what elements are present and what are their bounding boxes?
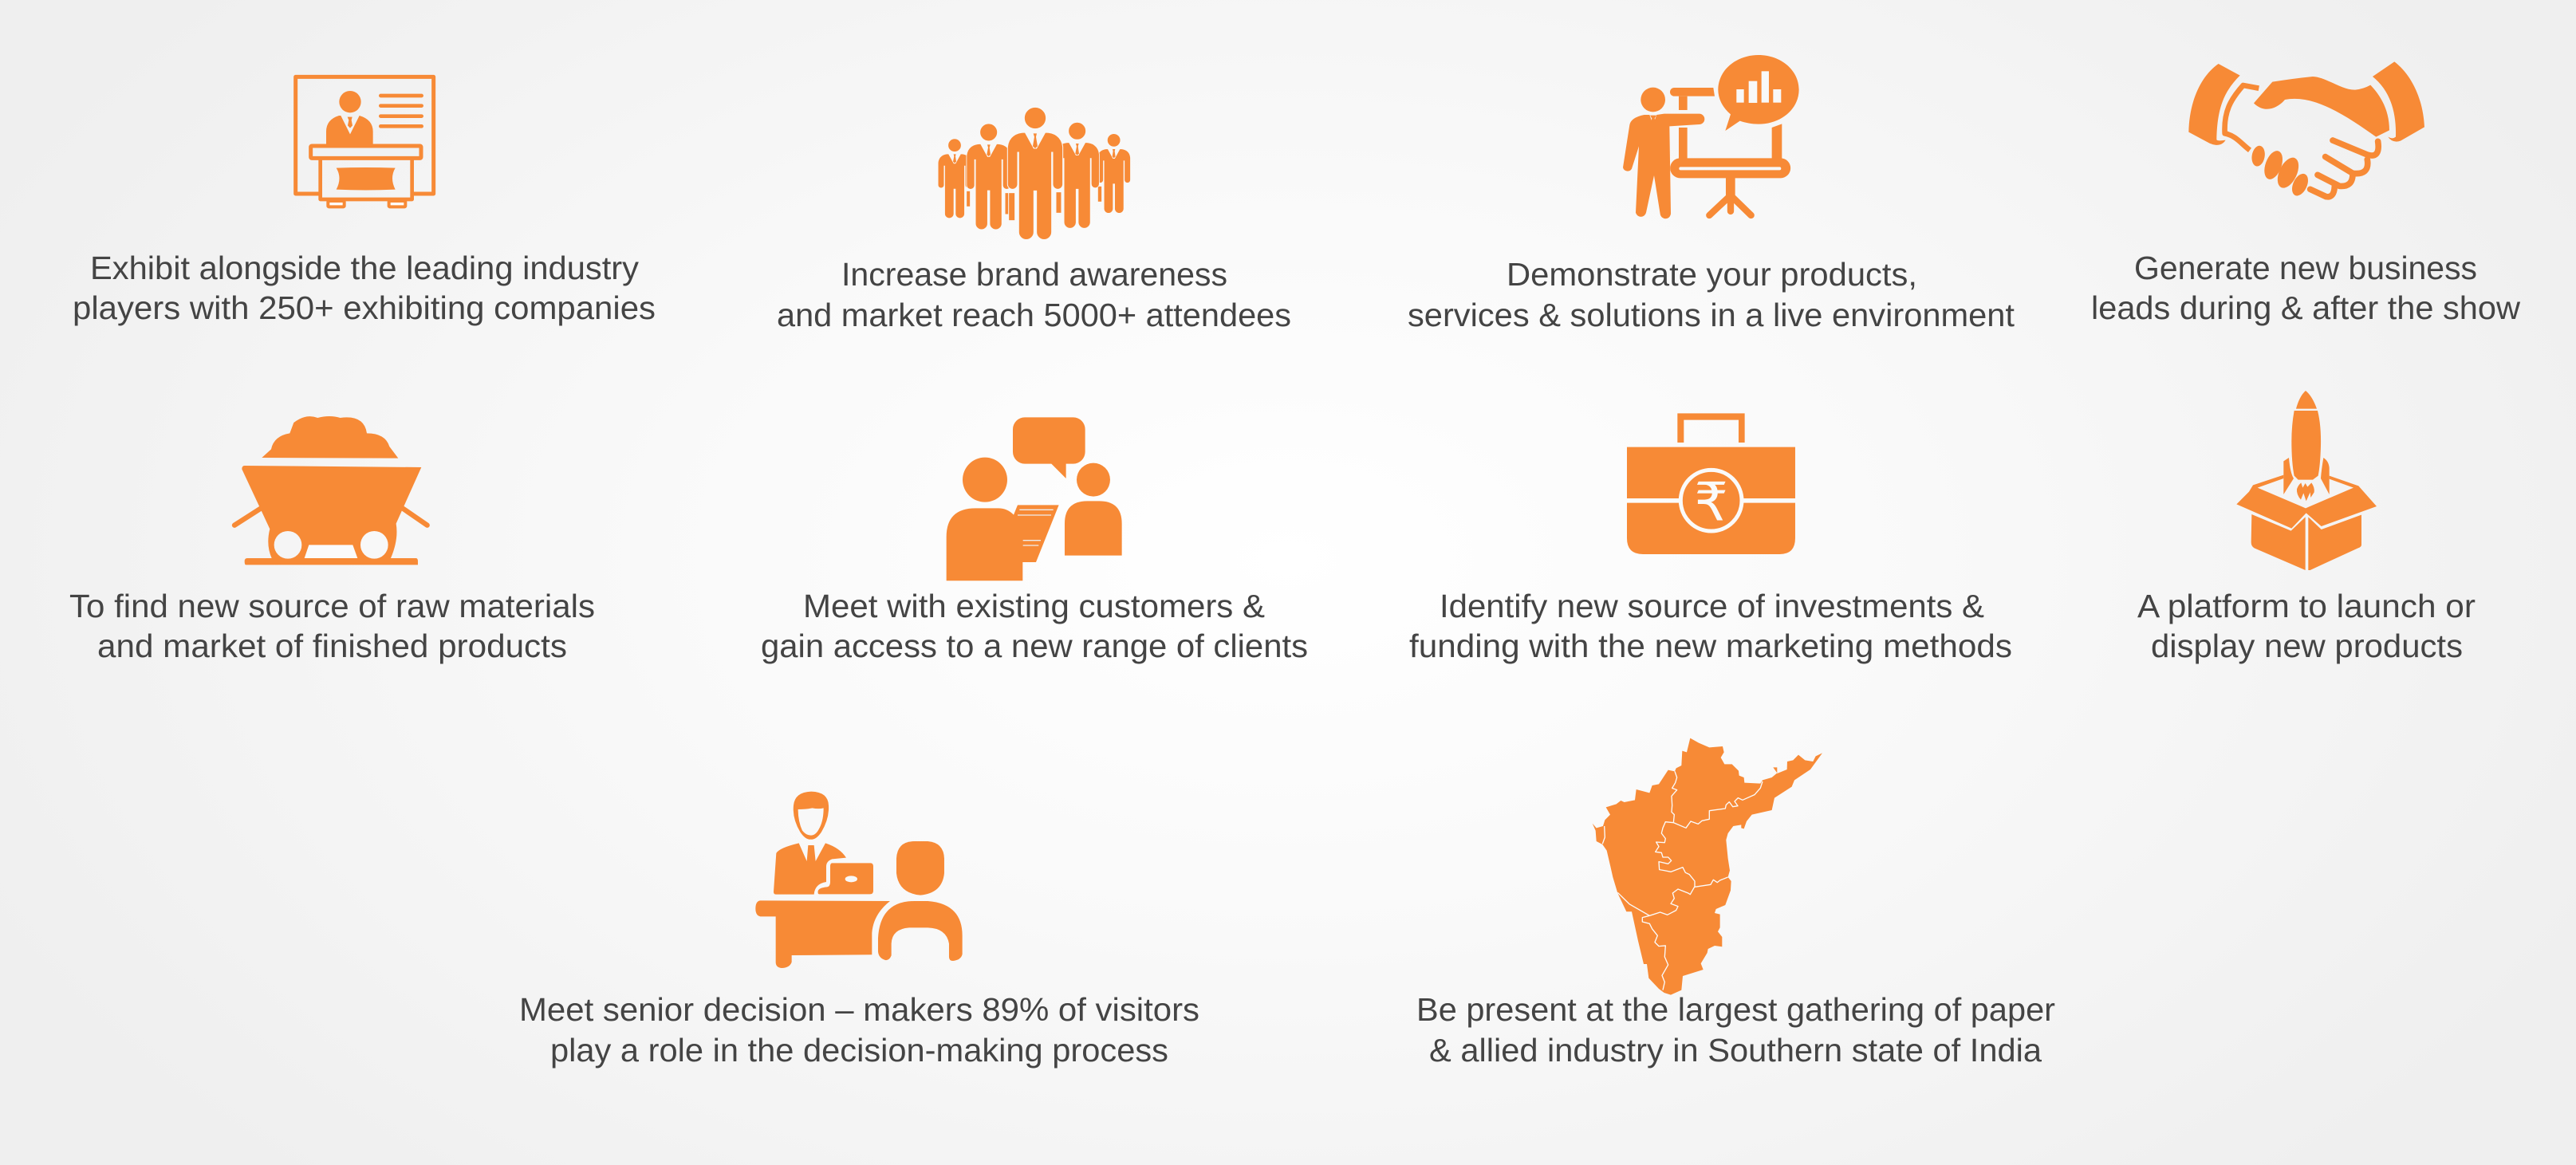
icon: rocket from box bbox=[2236, 391, 2377, 570]
text: southern India gathering bbox=[1416, 991, 2055, 1069]
text: live demonstration: services & solutions in a live environment bbox=[1408, 297, 2015, 333]
icon: meeting at desk bbox=[755, 792, 963, 968]
text: southern India gathering: & allied industry in Southern state of India bbox=[1429, 1032, 2042, 1069]
icon: mine cart bbox=[234, 416, 427, 565]
panel: meet customers bbox=[761, 417, 1308, 664]
text: business leads: leads during & after the show bbox=[2091, 289, 2520, 326]
text: brand awareness bbox=[777, 256, 1291, 333]
text: senior decision makers: Meet senior decision – makers 89% of visitors bbox=[519, 991, 1199, 1028]
panel: southern India gathering bbox=[1416, 738, 2055, 1069]
icon: two people talking bbox=[947, 417, 1122, 581]
text: investments: Identify new source of investments & bbox=[1440, 588, 1984, 624]
text: live demonstration bbox=[1408, 256, 2015, 333]
panel: business leads bbox=[2091, 61, 2520, 326]
panel: exhibit alongside industry players bbox=[73, 77, 656, 326]
text: raw materials bbox=[69, 588, 595, 664]
panel: raw materials bbox=[69, 416, 595, 664]
text: raw materials: and market of finished products bbox=[97, 628, 567, 664]
icon: group of business people bbox=[938, 107, 1130, 239]
panel: senior decision makers bbox=[519, 792, 1199, 1069]
text: senior decision makers: play a role in the decision-making process bbox=[550, 1032, 1168, 1069]
icon: handshake bbox=[2188, 61, 2424, 199]
text: launch products: display new products bbox=[2151, 628, 2463, 664]
text: senior decision makers bbox=[519, 991, 1199, 1069]
text: launch products: A platform to launch or bbox=[2137, 588, 2476, 624]
text: meet customers: Meet with existing customers & bbox=[803, 588, 1265, 624]
icon: briefcase with rupee: ₹ bbox=[1694, 471, 1728, 533]
text: southern India gathering: Be present at the largest gathering of paper bbox=[1416, 991, 2055, 1028]
icon: presenter with chart board bbox=[1623, 55, 1799, 218]
text: business leads: Generate new business bbox=[2134, 250, 2477, 286]
text: launch products bbox=[2137, 588, 2476, 664]
panel: brand awareness bbox=[777, 107, 1291, 333]
text: meet customers: gain access to a new range of clients bbox=[761, 628, 1308, 664]
text: investments bbox=[1409, 588, 2012, 664]
panel: live demonstration bbox=[1408, 55, 2015, 333]
text: brand awareness: and market reach 5000+ attendees bbox=[777, 297, 1291, 333]
text: meet customers bbox=[761, 588, 1308, 664]
panel: investments bbox=[1409, 413, 2012, 664]
text: exhibit alongside bbox=[73, 250, 656, 326]
text: live demonstration: Demonstrate your products, bbox=[1507, 256, 1917, 293]
icon: exhibitor at booth bbox=[296, 77, 434, 207]
icon: map of southern India bbox=[1593, 738, 1822, 995]
panel: launch products bbox=[2137, 391, 2476, 664]
icon: briefcase with rupee bbox=[1627, 413, 1795, 554]
text: business leads bbox=[2091, 250, 2520, 326]
text: exhibit alongside: Exhibit alongside the leading industry bbox=[90, 250, 639, 286]
text: investments: funding with the new marketing methods bbox=[1409, 628, 2012, 664]
text: raw materials: To find new source of raw materials bbox=[69, 588, 595, 624]
text: exhibit alongside: players with 250+ exhibiting companies bbox=[73, 289, 656, 326]
text: brand awareness: Increase brand awareness bbox=[841, 256, 1227, 293]
